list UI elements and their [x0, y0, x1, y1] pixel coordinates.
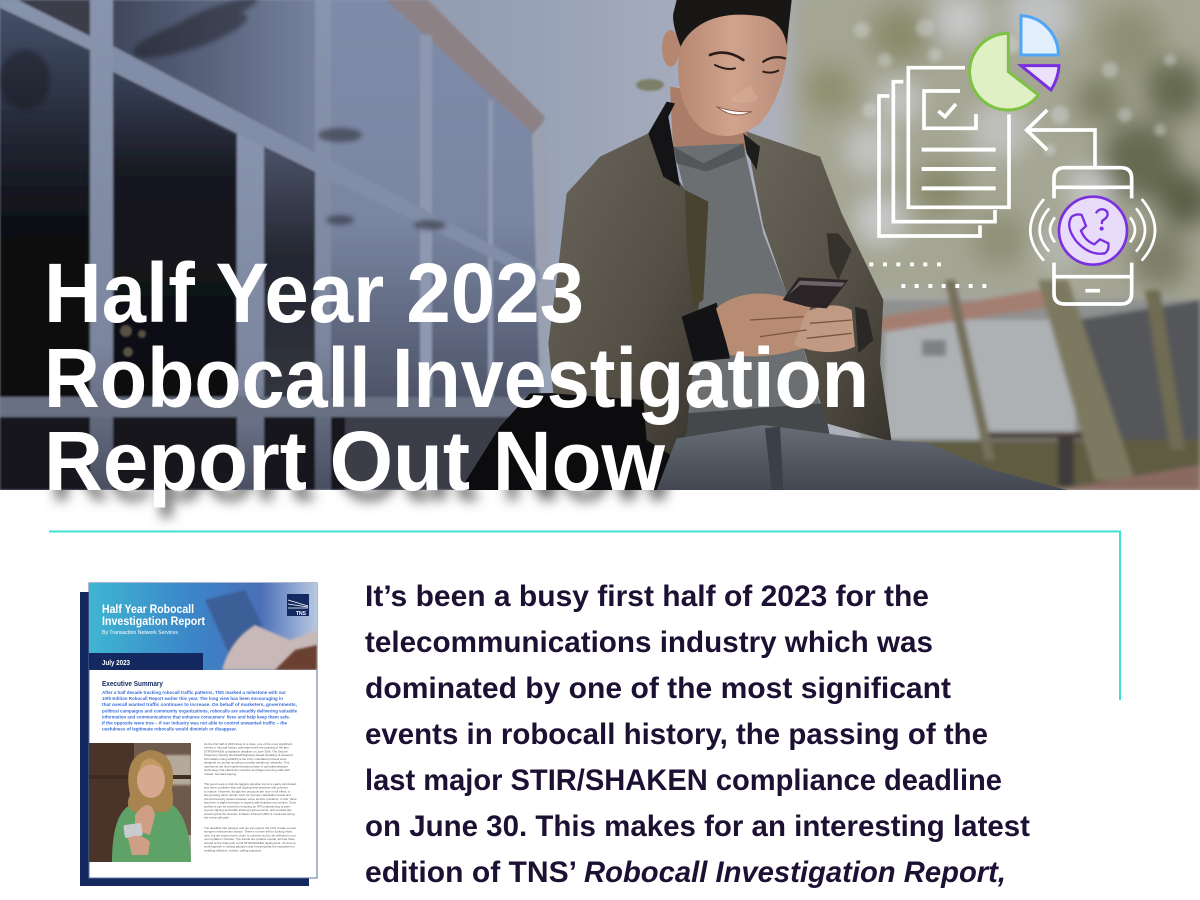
sleeve cuff	[682, 303, 730, 362]
report body text: events in robocall history culminated with the passing of the last	[204, 746, 289, 750]
executive summary: If the opposite were true – if our industry was not able to control unwanted traffic – the	[102, 720, 287, 726]
report body text: arrived at the final push to full STIR/SHAKEN deployment. It's time to	[204, 841, 296, 845]
executive summary: After a half decade tracking robocall traffic patterns, TNS marked a milestone with our	[102, 690, 286, 696]
report body text: stringent enforcement stance. There's no time left for looking short	[204, 830, 292, 834]
report body text: enabling effective, trusted, calling practices.	[204, 848, 262, 852]
report body text: has been a slight decrease in signed calls between top carriers. Such	[204, 801, 296, 805]
report title: Investigation Report	[102, 614, 205, 628]
report body text: The deadline has passed, and we can expect the FCC to take a more	[204, 826, 297, 830]
woman photo	[89, 743, 191, 862]
report body text: next update in October. The trends are positive overall, and we have	[204, 837, 295, 841]
icon: document stack	[879, 68, 1009, 236]
eyebrows, eyes and smile	[710, 53, 785, 73]
report body text: ensuring that the Session Initiation Protocol (SIP) is continued along	[204, 812, 295, 816]
sweater	[674, 143, 820, 414]
executive summary: Executive Summary	[102, 679, 164, 688]
executive summary: that overall wanted traffic continues to increase. On behalf of marketers, governments,	[102, 702, 298, 708]
dotted connector lines	[869, 262, 986, 288]
teal frame line	[49, 532, 1120, 700]
intro paragraph: Robocall Investigation Report,	[584, 856, 1006, 889]
report body text: to-peer signing and traffic-sharing improvements, and consistently	[204, 808, 292, 812]
title: Report Out Now	[44, 414, 666, 508]
date bar: July 2023	[102, 660, 130, 667]
report body text: technology that effectively monitors and flags incoming calls with	[204, 768, 290, 772]
report body text: and we're confident that call signing best practices will continue	[204, 786, 288, 790]
photo background: white building and roof	[860, 280, 1200, 490]
jeans	[657, 425, 1067, 490]
title: Robocall Investigation	[44, 331, 869, 425]
intro paragraph: telecommunications industry which was	[365, 626, 933, 659]
report body text: interconnectivity issues between voice service providers. In fact, there	[204, 797, 297, 801]
report body text	[204, 742, 297, 852]
report body text: cuts, but we expect some churn to continue and to be reflected in our	[204, 833, 296, 837]
hero photo: man using phone outside a glass building	[0, 0, 1200, 490]
photo background: small bokeh	[854, 19, 1176, 156]
report title: Half Year Robocall	[102, 602, 194, 616]
photo background: blurred trees	[790, 0, 1200, 300]
executive summary: usefulness of legitimate robocalls would diminish or disappear.	[102, 727, 237, 733]
intro paragraph: events in robocall history, the passing of the	[365, 718, 988, 751]
icon group: report, pie chart, arrow and ringing phone	[869, 16, 1155, 304]
report body text: STIR/SHAKEN compliance deadline on June 30th. The Secure	[204, 749, 288, 753]
report title: By Transaction Network Services	[102, 630, 178, 636]
executive summary: political campaigns and community organizations, robocalls are steadily delivering valuable	[102, 708, 297, 714]
report body text: problems can be solved by enacting an IPX underpinning of peer-	[204, 804, 291, 808]
report body text: the entire call path.	[204, 816, 230, 820]
neck	[670, 87, 750, 153]
report page	[89, 583, 317, 878]
report body text: to mature. However, though the protocols are now in full effect, a	[204, 789, 290, 793]
executive summary	[102, 679, 298, 733]
report body text: Telephony Identity Revisited/Signature-based Handling of Asserted	[204, 753, 293, 757]
intro paragraph	[365, 580, 1030, 889]
intro paragraph: It’s been a busy first half of 2023 for the	[365, 580, 929, 613]
person	[460, 0, 1067, 490]
TNS logo	[287, 594, 309, 617]
bag	[460, 392, 670, 490]
intro paragraph: on June 30. This makes for an interesting latest	[365, 810, 1030, 843]
report header banner	[89, 583, 317, 670]
executive summary: 10th Edition Robocall Report earlier this year. The long view has been encouraging in	[102, 696, 283, 702]
date bar	[89, 653, 203, 670]
report body text: represents the final implementation phase of call authentication	[204, 764, 288, 768]
hair	[673, 0, 792, 47]
title	[44, 246, 869, 518]
TNS logo: TNS	[296, 611, 307, 617]
photo background: glass building	[0, 0, 552, 490]
report body text: trusted, branded signing.	[204, 772, 237, 776]
report cover thumbnail	[80, 583, 317, 886]
jacket	[548, 133, 700, 457]
report body text: As the first half of 2023 drew to a close, one of the most significant	[204, 742, 292, 746]
intro paragraph: dominated by one of the most significant	[365, 672, 951, 705]
report body text: designed to combat spoofing on public telephone networks. This	[204, 761, 290, 765]
icon: ringing phone with question	[1030, 168, 1155, 304]
intro paragraph: last major STIR/SHAKEN compliance deadline	[365, 764, 1002, 797]
icon: pie chart	[970, 16, 1059, 110]
photo background: tree reflections in glass	[0, 0, 446, 230]
phone	[783, 277, 848, 308]
soft leaf blur near shoulder	[636, 79, 664, 91]
arrow: phone data to report	[1027, 110, 1095, 166]
hands	[716, 294, 810, 356]
report body text: The good news is that the lagging adoption curve is nearly eliminated,	[204, 782, 297, 786]
title: Half Year 2023	[44, 246, 584, 340]
report body text: few growing pains remain such as improper attestation levels and	[204, 793, 291, 797]
report title	[102, 602, 205, 636]
navy backing sheet	[80, 592, 309, 886]
title: Report Out Now	[50, 424, 676, 518]
report body text: work together in driving adoption and ensuring that the ecosystem is	[204, 845, 295, 849]
report body text: information using toKENS is the FCC-mandated protocol suite	[204, 757, 287, 761]
executive summary: information and communications that enhance consumers' lives and help keep them safe.	[102, 714, 290, 720]
intro paragraph: edition of TNS’	[365, 856, 577, 889]
jacket collar	[648, 102, 680, 187]
head	[678, 13, 789, 136]
small window lights	[120, 325, 146, 357]
